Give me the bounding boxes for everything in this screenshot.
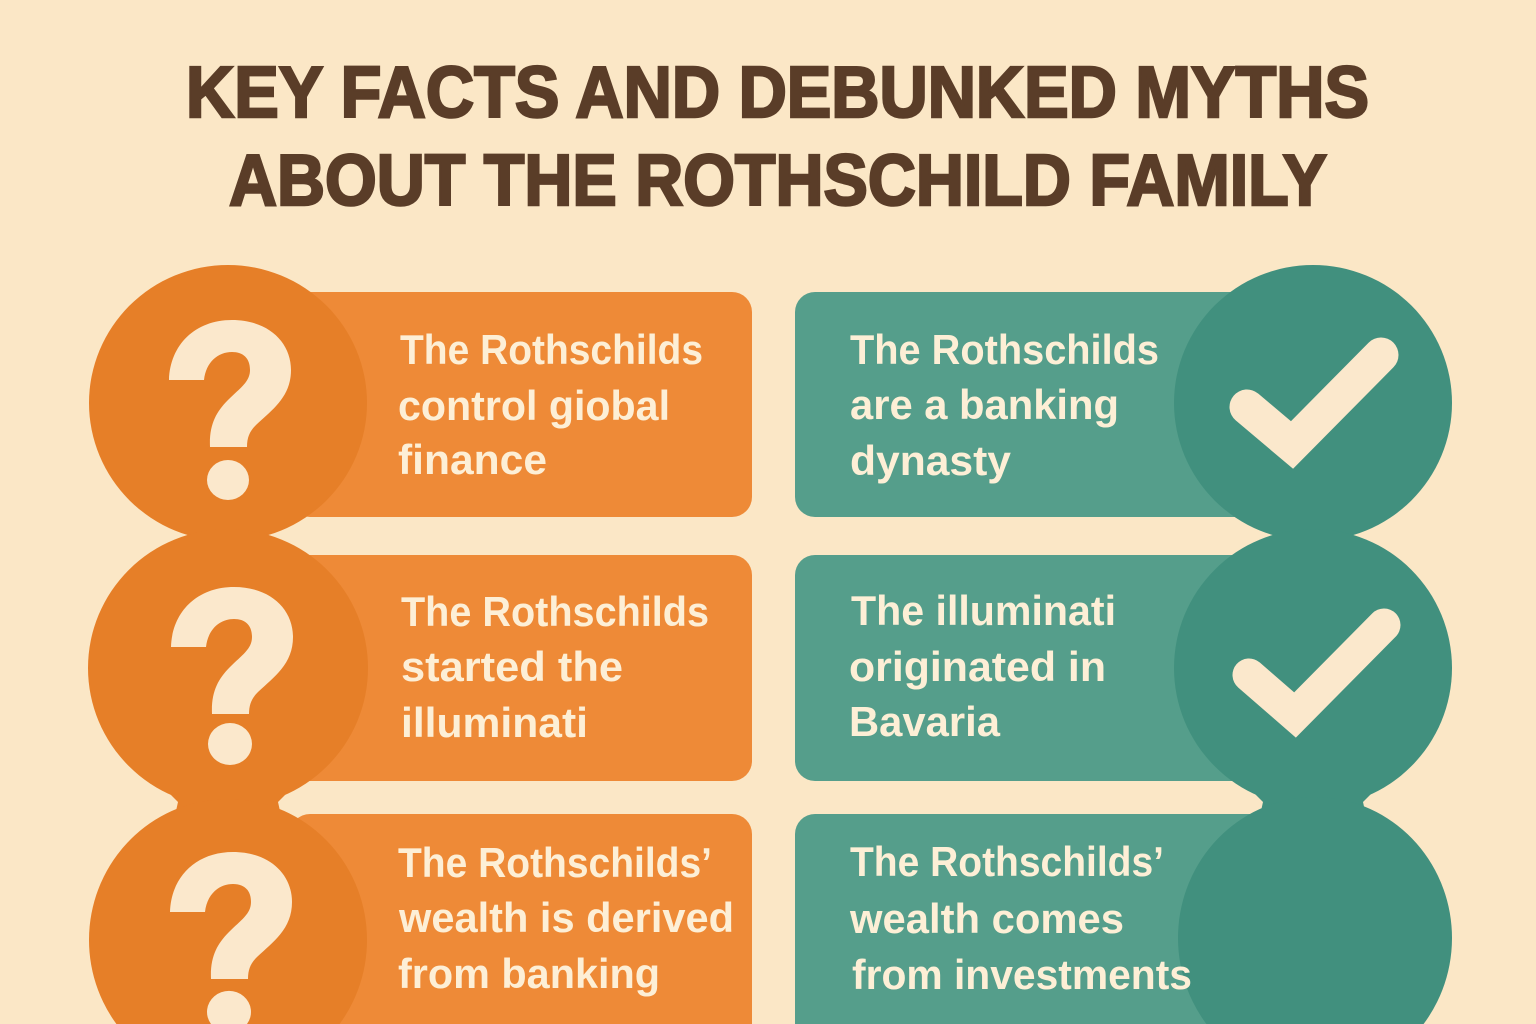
myth text 1: control giobal xyxy=(398,382,670,429)
fact text 3: The Rothschilds’ xyxy=(850,838,1164,885)
fact text 3: wealth comes xyxy=(849,895,1124,942)
myth text 1 xyxy=(398,326,703,483)
fact text 1: are a banking xyxy=(850,381,1119,428)
fact text 2: The illuminati xyxy=(851,587,1116,634)
fact text 1: dynasty xyxy=(850,437,1012,484)
fact text 1: The Rothschilds xyxy=(850,326,1159,373)
icon: question mark circle 2 xyxy=(88,529,368,807)
fact row 3 xyxy=(795,794,1452,1024)
myth row 1 xyxy=(89,265,752,541)
myth text 3 xyxy=(398,839,734,997)
myth text 1: The Rothschilds xyxy=(400,326,703,373)
fact text 1 xyxy=(850,326,1159,484)
fact text 2: originated in xyxy=(849,643,1106,690)
fact row 1 xyxy=(795,265,1452,541)
myth row 3 xyxy=(89,794,752,1024)
myth text 2: illuminati xyxy=(401,699,588,746)
panel: facts column xyxy=(795,265,1452,1024)
title xyxy=(186,53,1369,221)
fact text 2 xyxy=(849,587,1116,745)
myth text 2: The Rothschilds xyxy=(401,588,709,635)
myth text 3: from banking xyxy=(398,950,660,997)
icon: question mark circle 3 xyxy=(89,794,367,1024)
icon: check mark circle 2 xyxy=(1174,529,1452,807)
fact text 3 xyxy=(849,838,1192,998)
icon: check mark circle 1 xyxy=(1174,265,1452,541)
myth text 2: started the xyxy=(401,643,623,690)
panel: myths column xyxy=(88,265,752,1024)
icon: empty teal circle 3 xyxy=(1178,794,1452,1024)
fact text 2: Bavaria xyxy=(849,698,1001,745)
myth text 1: finance xyxy=(398,436,547,483)
title: ABOUT THE ROTHSCHILD FAMILY xyxy=(229,141,1327,221)
myth text 3: wealth is derived xyxy=(398,894,734,941)
icon: question mark circle 1 xyxy=(89,265,367,541)
fact row 2 xyxy=(795,529,1452,807)
myth text 2 xyxy=(401,588,709,746)
title: KEY FACTS AND DEBUNKED MYTHS xyxy=(186,53,1369,133)
fact text 3: from investments xyxy=(852,951,1192,998)
myth row 2 xyxy=(88,529,752,807)
myth text 3: The Rothschilds’ xyxy=(398,839,712,886)
